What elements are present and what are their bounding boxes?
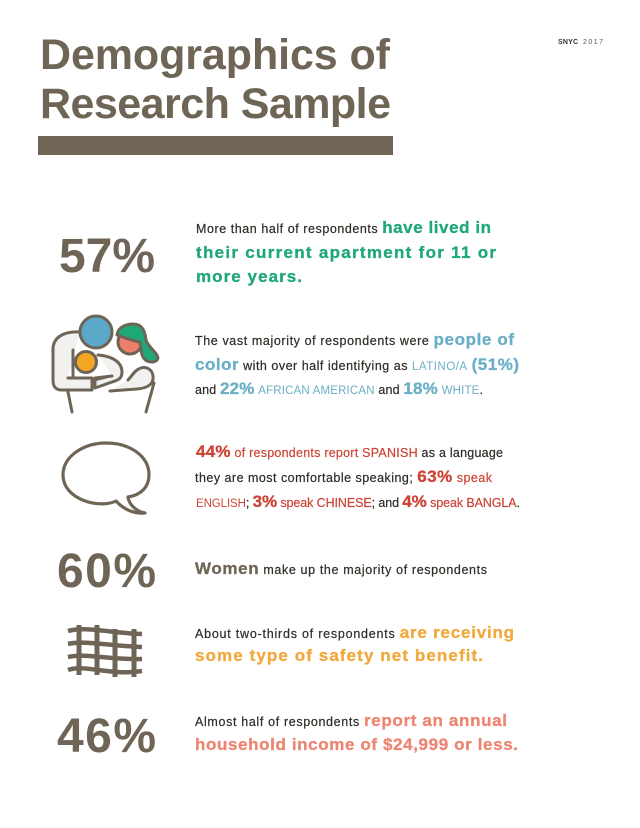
text block: safety net benefit (195, 623, 514, 665)
text block: women: Women make up the majority of respondents (195, 559, 487, 578)
text block: income: household income of $24,999 or less. (195, 735, 518, 754)
text block: apartment tenure (196, 218, 496, 286)
big head (80, 316, 112, 348)
credit (558, 39, 603, 46)
text block: income (195, 711, 518, 754)
text block: people of color (195, 330, 519, 398)
text block: languages: they are most comfortable speaking; 63% speak (195, 467, 493, 486)
title: Demographics of (40, 31, 391, 79)
text block: languages: 44% of respondents report SPANISH as a language (196, 442, 503, 461)
woman face (118, 330, 142, 354)
icon: speech bubble (63, 443, 149, 513)
title rule (38, 136, 393, 155)
woman hair (117, 324, 158, 362)
text block: apartment tenure: More than half of respondents have lived in (196, 218, 491, 237)
title: Research Sample (40, 80, 391, 128)
text block: safety net benefit: some type of safety net benefit. (195, 646, 483, 665)
credit: 2017 (583, 39, 603, 46)
stat: 46%: 46% (57, 710, 156, 763)
text block: income: Almost half of respondents report an annual (195, 711, 507, 730)
arm and legs (110, 368, 153, 391)
stat: 57%: 57% (59, 230, 155, 283)
text block: languages (195, 442, 520, 511)
text block: apartment tenure: more years. (196, 267, 302, 286)
icon: safety net (68, 625, 142, 677)
text block: people of color: and 22% AFRICAN AMERICAN and 18% WHITE. (195, 379, 483, 398)
icon: family (53, 316, 158, 412)
text block: safety net benefit: About two-thirds of respondents are receiving (195, 623, 514, 642)
stat: 60%: 60% (57, 545, 156, 598)
baby head (76, 352, 96, 372)
text block: languages: ENGLISH; 3% speak CHINESE; and 4% speak BANGLA. (196, 492, 520, 511)
credit: SNYC (558, 39, 578, 46)
title (40, 31, 391, 128)
text block: people of color: color with over half identifying as LATINO/A (51%) (195, 355, 519, 374)
text block: people of color: The vast majority of respondents were people of (195, 330, 514, 349)
text block: apartment tenure: their current apartment for 11 or (196, 243, 496, 262)
